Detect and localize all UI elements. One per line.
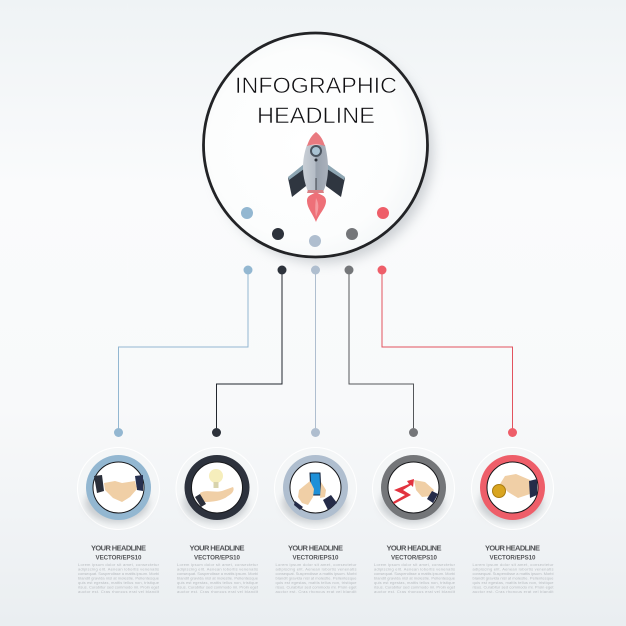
text block: column 5: Lorem ipsum dolor sit amet, consectetur — [472, 562, 554, 567]
panel: smartphone — [274, 448, 356, 530]
panel: lightbulb in hand — [176, 448, 258, 530]
icon: handshake — [94, 475, 143, 502]
text block: column 4: consequat. Suspendisse a mattis ipsum. Morbi — [374, 571, 455, 576]
text block: column 1: blandit gravida nisl at molestie. Pellentesque — [78, 576, 160, 580]
connector: gray — [344, 266, 418, 437]
text block: column 1: risus. Curabitur sed commodo mi. Proin eget — [78, 584, 160, 590]
text block: column 5: adipiscing elit. Aenean lobortis venenatis — [472, 566, 554, 572]
text block: column 4: auctor est. Cras rhoncus erat vel blandit — [374, 589, 456, 594]
text block: column 4: quis est egestas, mattis tellus non, tristique — [374, 580, 456, 585]
text block: column 2: consequat. Suspendisse a mattis ipsum. Morbi — [177, 571, 258, 576]
icon: hand and red arrow — [393, 479, 438, 504]
text block: column 1: quis est egestas, mattis tellus non, tristique — [78, 580, 160, 585]
icon: lightbulb and hand — [195, 469, 234, 507]
text block: column 1: Lorem ipsum dolor sit amet, consectetur — [78, 562, 160, 567]
text block: column 4: blandit gravida nisl at molestie. Pellentesque — [374, 576, 456, 580]
text block: column 5: quis est egestas, mattis tellus non, tristique — [472, 580, 554, 585]
connector: blue — [114, 266, 252, 437]
text block: column 5 — [472, 544, 554, 594]
title: HEADLINE — [257, 103, 375, 128]
text block: column 1 — [78, 544, 160, 594]
text block: column 5: VECTOR/EPS10 — [490, 554, 536, 562]
text block: column 4: risus. Curabitur sed commodo mi. Proin eget — [374, 584, 456, 590]
text block: column 3: Lorem ipsum dolor sit amet, consectetur — [276, 562, 357, 567]
text block: column 4: YOUR HEADLINE — [386, 544, 442, 552]
text block: column 3: risus. Curabitur sed commodo mi. Proin eget — [276, 584, 357, 590]
panel: coin in hand — [472, 448, 554, 530]
text block: column 1: YOUR HEADLINE — [91, 544, 146, 552]
text block: column 1: VECTOR/EPS10 — [96, 554, 142, 562]
title — [235, 73, 397, 128]
title: INFOGRAPHIC — [235, 73, 397, 98]
text block: column 3 — [276, 544, 357, 594]
panel: handshake — [78, 448, 160, 530]
text block: column 3: VECTOR/EPS10 — [292, 554, 339, 562]
text block: column 3: quis est egestas, mattis tellus non, tristique — [276, 580, 357, 585]
text block: column 4 — [374, 544, 456, 594]
panel: growth arrow — [372, 448, 454, 530]
text block: column 5: auctor est. Cras rhoncus erat vel blandit — [472, 589, 554, 594]
text block: column 2 — [177, 544, 259, 594]
text block: column 3: consequat. Suspendisse a mattis ipsum. Morbi — [276, 571, 357, 576]
text block: column 2: YOUR HEADLINE — [190, 544, 244, 552]
text block: column 5: blandit gravida nisl at molestie. Pellentesque — [472, 576, 554, 580]
panel: main headline circle — [204, 33, 433, 263]
text block: column 4: Lorem ipsum dolor sit amet, consectetur — [374, 562, 456, 567]
text block: column 3: blandit gravida nisl at molestie. Pellentesque — [276, 576, 357, 580]
text block: column 2: VECTOR/EPS10 — [194, 554, 241, 562]
text block: column 2: risus. Curabitur sed commodo mi. Proin eget — [177, 584, 259, 590]
connector: light blue — [311, 266, 320, 437]
text block: column 2: blandit gravida nisl at molestie. Pellentesque — [177, 576, 259, 580]
text block: column 2: Lorem ipsum dolor sit amet, consectetur — [177, 562, 259, 567]
text block: column 3: adipiscing elit. Aenean lobortis venenatis — [276, 566, 356, 572]
text block: column 3: YOUR HEADLINE — [288, 544, 343, 552]
text block: column 4: VECTOR/EPS10 — [391, 554, 438, 562]
marker dots — [241, 207, 389, 247]
text block: column 5: risus. Curabitur sed commodo mi. Proin eget — [472, 584, 554, 590]
text block: column 2: quis est egestas, mattis tellus non, tristique — [177, 580, 259, 585]
text block: column 3: auctor est. Cras rhoncus erat vel blandit — [276, 589, 357, 594]
connector: red — [378, 266, 517, 437]
text block: column 2: auctor est. Cras rhoncus erat vel blandit — [177, 589, 259, 594]
icon: hands holding phone — [294, 473, 337, 510]
text block: column 4: adipiscing elit. Aenean lobortis venenatis — [374, 566, 455, 572]
text block: column 1: auctor est. Cras rhoncus erat vel blandit — [78, 589, 160, 594]
text block: column 1: consequat. Suspendisse a mattis ipsum. Morbi — [78, 571, 159, 576]
text block: column 5: consequat. Suspendisse a mattis ipsum. Morbi — [472, 571, 554, 576]
text block: column 1: adipiscing elit. Aenean lobortis venenatis — [78, 566, 159, 572]
connector: dark — [212, 266, 286, 437]
text block: column 2: adipiscing elit. Aenean lobortis venenatis — [177, 566, 258, 572]
icon: hand holding coin — [492, 474, 537, 498]
text block: column 5: YOUR HEADLINE — [485, 544, 540, 552]
icon: rocket — [288, 132, 345, 222]
